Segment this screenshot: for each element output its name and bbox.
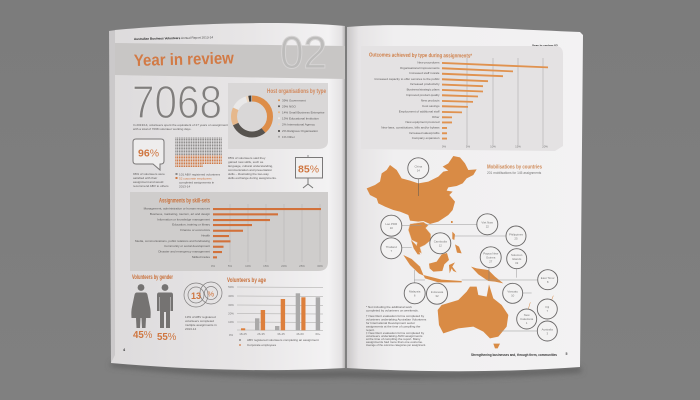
country circle: Papua New Guinea: Guinea xyxy=(486,256,496,260)
icon: presentation board 85% xyxy=(296,155,322,188)
country circle: Malaysia: 6 xyxy=(414,294,416,298)
country circle: Fiji: 7 xyxy=(546,309,548,313)
donut legend: 29% NGO xyxy=(282,104,297,108)
bar chart: outcomes: New products xyxy=(421,98,440,102)
bar chart: Education, training or library xyxy=(172,222,210,226)
bar chart: volunteers by age: 60+ xyxy=(316,332,321,336)
country circle: Fiji xyxy=(537,299,557,319)
running head: Year in review 02 xyxy=(532,44,558,48)
country circle: Philippines xyxy=(506,226,526,246)
footnotes: assignments had more than one outcome. xyxy=(366,340,423,344)
magazine shadow xyxy=(110,362,582,378)
donut legend: 39% Government xyxy=(282,98,306,102)
country circle: Thailand: 7 xyxy=(390,249,392,253)
bar chart: outcomes: New procedures xyxy=(417,60,440,64)
bar chart: volunteers by age: 30% xyxy=(228,303,234,307)
pictogram legend: 2013-14 xyxy=(179,184,190,188)
country circle: Papua New Guinea: 27 xyxy=(489,260,493,264)
heading: Assignments by skill-sets xyxy=(159,198,210,204)
callout: 96% speech bubble xyxy=(133,139,164,170)
text: multiple assignments: 13% of ABV registered xyxy=(185,315,216,319)
bar chart: outcomes: New laws, constitutions, bills and/or bylaws xyxy=(381,126,440,130)
country circle: East Timor: 8 xyxy=(547,280,549,284)
text: skills gained: gained new skills, such as xyxy=(228,160,264,164)
footnotes: ‡ New Rent evaluation forms completed by xyxy=(366,331,425,335)
donut chart xyxy=(234,98,270,134)
country circle: Australia: 3 xyxy=(546,332,548,336)
pictogram legend: completed assignments in xyxy=(179,180,215,184)
bar chart: Finance or economics xyxy=(180,228,210,232)
bar chart: Community or social development xyxy=(164,244,210,248)
country circle: Vanuatu: Vanuatu xyxy=(507,290,518,294)
bar chart: 25% xyxy=(299,264,305,268)
panel: host organisations xyxy=(228,83,328,149)
country circle: Cambodia xyxy=(430,233,451,254)
heading: Outcomes achieved by type during assignments* xyxy=(369,53,473,60)
country circle: Vanuatu: 10 xyxy=(511,294,515,298)
stat: 55% male: 55% xyxy=(157,332,177,343)
pictogram legend: 52 corporate employees xyxy=(179,176,212,180)
connector lines xyxy=(402,224,553,331)
bar chart: 10% xyxy=(245,264,251,268)
donut legend: 13% Educational Institution xyxy=(282,116,319,120)
bar chart: volunteers by age: Corporate employees xyxy=(247,343,277,347)
donut legend: 2% Religious Organisation xyxy=(282,129,318,133)
text: skills gained: skills exchange during assignments. xyxy=(228,176,277,180)
under sheet xyxy=(109,30,116,363)
callout: 96% speech bubble: 96% xyxy=(138,148,159,160)
text: multiple assignments: multiple assignments in xyxy=(185,323,217,327)
country circle: Fiji: Fiji xyxy=(545,305,549,309)
country circle: China xyxy=(408,158,429,196)
bar chart: Health xyxy=(201,234,210,238)
country circle: New Caledonia: 1 xyxy=(526,321,528,325)
country circle: Solomon Islands: Islands xyxy=(512,257,522,261)
country circle: Australia xyxy=(537,321,557,341)
heading: Host organisations by type xyxy=(267,89,327,95)
bar chart: volunteers by age xyxy=(228,285,323,347)
text: 96% satisfaction: recommend ABV to others xyxy=(133,184,169,188)
country circle: Viet Nam: 22 xyxy=(486,224,489,228)
bar chart: outcomes: 5% xyxy=(466,144,471,148)
intro text xyxy=(133,123,230,131)
bar chart: outcomes: Organisational improvements xyxy=(400,66,440,70)
bar chart: outcomes: Increased capacity to offer services to the public xyxy=(375,77,440,81)
header text: Australian Business Volunteers Annual Report 2013-14 xyxy=(134,35,213,41)
bar chart: outcomes: New equipment procured xyxy=(405,120,440,124)
bar chart: Information or knowledge management xyxy=(157,218,210,222)
icon: female figure xyxy=(131,284,151,328)
bar chart: outcomes: Company expansion xyxy=(412,136,440,140)
bar chart: 30% xyxy=(317,264,323,268)
bar chart: outcomes: 10% xyxy=(490,144,496,148)
text: skills gained: language, cultural understanding, xyxy=(228,164,273,168)
country circle: Solomon Islands: Solomon xyxy=(511,253,523,257)
country circle: Vanuatu xyxy=(503,283,523,303)
bar chart: outcomes: Other xyxy=(432,115,440,119)
country circle: Thailand xyxy=(381,238,402,259)
country circle: Philippines: 25 xyxy=(514,236,518,240)
country circle: Viet Nam xyxy=(477,214,498,235)
bar chart: 15% xyxy=(263,264,269,268)
footnotes: report. xyxy=(366,328,375,332)
bar chart: volunteers by age: 18-25 xyxy=(239,332,247,336)
footnotes: for International Development sector xyxy=(366,321,415,325)
text: multiple assignments: volunteers completed xyxy=(185,319,214,323)
map: China xyxy=(367,156,477,224)
country circle: Lao PDR: Lao PDR xyxy=(385,222,397,226)
country circle: Indonesia xyxy=(426,283,448,304)
bar chart: 0% xyxy=(211,264,216,268)
bar chart: outcomes: 20% xyxy=(542,144,548,148)
title band xyxy=(115,43,345,79)
donut legend xyxy=(278,98,325,139)
panel: outcomes xyxy=(361,46,563,151)
country circle: Thailand: Thailand xyxy=(386,245,397,249)
country circle: Papua New Guinea: Papua New xyxy=(483,252,499,256)
country circle: China: 14 xyxy=(417,168,420,172)
bar chart: volunteers by age: 20% xyxy=(228,312,234,316)
bar chart: volunteers by age: 0% xyxy=(229,333,234,337)
intro text: In 2013/14, volunteers spent the equivalent of 27 years on assignments, xyxy=(133,123,230,127)
text: skills gained: communication and presentation xyxy=(228,168,272,172)
text: skills gained: skills – illustrating the two-way xyxy=(228,172,269,176)
icon: presentation board 85%: 85% xyxy=(298,164,319,176)
page number 5: 5 xyxy=(566,352,568,356)
bar chart: outcomes: Increased staff morale xyxy=(409,71,440,75)
map: Asia Pacific xyxy=(367,156,508,348)
text: 96% satisfaction: assignment and would xyxy=(133,180,164,184)
bar chart: Management, administration or human resources xyxy=(144,206,210,210)
bar chart: Media, communications, public relations and fundraising xyxy=(135,239,210,243)
country circle: Lao PDR: 10 xyxy=(390,226,393,230)
heading: year in review: Year in review xyxy=(134,49,234,70)
subheading: 201 mobilisations for 145 assignments xyxy=(487,171,542,175)
panel: assignments by skill-sets xyxy=(130,192,328,271)
donut legend: 2% International Agency xyxy=(282,122,315,126)
country circle: Indonesia: 32 xyxy=(435,294,439,298)
country circle: Philippines: Philippines xyxy=(509,232,524,236)
bar chart: outcomes: Improved product quality xyxy=(406,93,440,97)
pictogram legend: 101 ABV registered volunteers xyxy=(179,172,221,176)
text: skills gained: 85% of volunteers said they xyxy=(228,156,266,160)
bar chart xyxy=(135,204,323,268)
country circle: China: China xyxy=(415,164,422,168)
bar chart: 5% xyxy=(228,264,233,268)
map: South-East Asia mainland xyxy=(408,222,431,253)
country circle: Malaysia xyxy=(404,283,425,304)
footnotes: * Not including the additional work xyxy=(366,305,412,309)
stat: 45% female: 45% xyxy=(133,330,153,341)
bar chart: volunteers by age: 10% xyxy=(228,320,234,324)
panel: left page xyxy=(111,23,345,370)
footnotes: volunteers undertaking Australian Volunteers xyxy=(366,318,427,322)
donut legend: 14% Small Business Enterprise xyxy=(282,110,325,114)
donut legend: 1% Other xyxy=(282,135,295,139)
bar chart: outcomes xyxy=(375,58,548,148)
bar chart: volunteers by age: 46-60 xyxy=(296,332,304,336)
bar chart: Disaster and emergency management xyxy=(158,250,210,254)
bar chart: volunteers by age: 26-35 xyxy=(257,332,265,336)
pictogram grid xyxy=(175,137,222,167)
map: Sumatra, Malaya and islands xyxy=(403,221,508,348)
heading: volunteers by age: Volunteers by age xyxy=(227,278,266,284)
icon: male figure xyxy=(157,284,173,328)
bar chart: volunteers by age: 36-45 xyxy=(277,332,285,336)
text: multiple assignments xyxy=(185,315,217,331)
country circle: Australia: Australia xyxy=(542,328,553,332)
bar chart: Business, marketing, tourism, art and design xyxy=(150,212,210,216)
venn circles 13%: % xyxy=(208,290,214,298)
bar chart: Skilled trades xyxy=(192,255,210,259)
bar chart: volunteers by age: 40% xyxy=(228,294,234,298)
heading: mobilisations by countries: Mobilisations by countries xyxy=(487,164,542,170)
bar chart: outcomes: Cost savings xyxy=(422,104,440,108)
country circle: East Timor: East Timor xyxy=(541,276,555,280)
country circle: Indonesia: Indonesia xyxy=(431,290,444,294)
bar chart: outcomes: Increased sales/profits xyxy=(409,131,440,135)
footnotes: assignments at the time of compiling the xyxy=(366,324,421,328)
venn circles 13% xyxy=(184,282,222,307)
bar chart: 20% xyxy=(281,264,287,268)
footnotes xyxy=(366,305,427,347)
country circle: Solomon Islands xyxy=(507,249,527,269)
text: 96% satisfaction: 96% of volunteers were xyxy=(133,172,165,176)
heading: volunteers by gender: Volunteers by gender xyxy=(132,275,173,281)
big number 7068: 7068 xyxy=(132,76,222,128)
bar chart: outcomes: Increased productivity xyxy=(410,82,440,86)
panel: right page xyxy=(347,25,583,371)
bar chart: outcomes: Business/strategic plans xyxy=(407,88,440,92)
tagline: Strengthening businesses and, through them, communities xyxy=(471,353,557,357)
text: skills gained xyxy=(228,156,277,180)
text: 96% satisfaction: satisfied with their xyxy=(133,176,157,180)
pictogram legend xyxy=(176,172,221,188)
intro text: with a total of 7068 volunteer working days. xyxy=(133,127,192,131)
country circle: Papua New Guinea xyxy=(480,247,501,268)
footnotes: completed by volunteers on weekends. xyxy=(366,308,419,312)
text: 96% satisfaction xyxy=(133,172,169,188)
country circle: East Timor xyxy=(538,270,558,290)
country circle: Malaysia: Malaysia xyxy=(409,290,421,294)
page number 4: 4 xyxy=(123,348,126,352)
country circle: Lao PDR xyxy=(381,215,402,236)
bar chart: outcomes: Employment of additional staff xyxy=(399,110,440,114)
bar chart: outcomes: 15% xyxy=(515,144,521,148)
footnotes: volunteers undertaking AVID assignments xyxy=(366,334,423,338)
country circle: Cambodia: Cambodia xyxy=(434,240,447,244)
section number: 02 xyxy=(280,27,327,78)
bar chart: volunteers by age: ABV registered volunteers completing an assignment xyxy=(247,338,319,342)
country circle: New Caledonia: New xyxy=(524,313,530,317)
bar chart: outcomes: 0% xyxy=(442,144,447,148)
country circle: New Caledonia xyxy=(517,309,537,329)
country circle: Cambodia: 12 xyxy=(439,244,442,248)
footnotes: at the time of compiling the report. Many xyxy=(366,337,421,341)
text: multiple assignments: 2013-14 xyxy=(185,327,196,331)
country circle: Viet Nam: Viet Nam xyxy=(481,220,494,224)
footnotes: † New Rent evaluation forms completed by xyxy=(366,314,425,318)
venn circles 13%: 13 xyxy=(191,291,201,301)
footnotes: Average of the outcome categories per assignment. xyxy=(366,343,426,347)
bar chart: volunteers by age: 50% xyxy=(228,285,234,289)
country circle: Solomon Islands: 19 xyxy=(515,261,519,265)
country circle: New Caledonia: Caledonia xyxy=(520,317,534,321)
